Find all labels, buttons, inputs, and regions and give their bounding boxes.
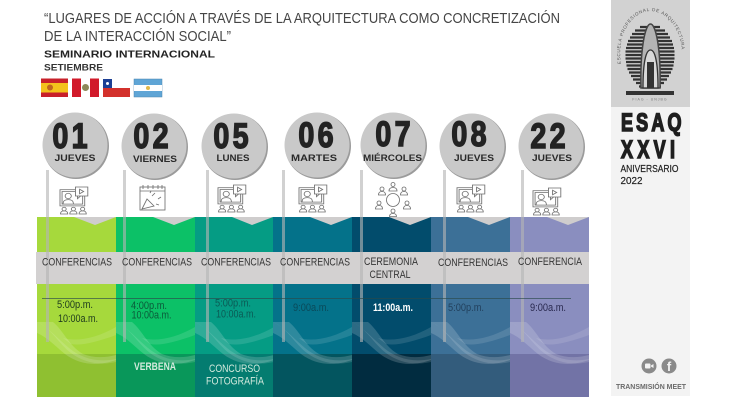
timeline colour columns bbox=[37, 217, 589, 397]
date: 02 viernes: 02 bbox=[133, 116, 169, 156]
logo bbox=[617, 8, 685, 102]
column 1 bbox=[37, 217, 116, 397]
icon: celebration calendar bbox=[140, 185, 165, 210]
date: 02 viernes: VIERNES bbox=[133, 154, 177, 165]
date: 22 jueves: 22 bbox=[530, 116, 566, 156]
date: 08 jueves bbox=[440, 114, 506, 180]
schedule times: 5:00p.m. bbox=[448, 302, 484, 314]
schedule times: 11:00a.m. bbox=[373, 302, 413, 314]
flag: Chile bbox=[103, 79, 130, 97]
activity icons bbox=[60, 182, 561, 216]
date: 01 jueves: JUEVES bbox=[54, 153, 96, 164]
column notches bbox=[74, 217, 589, 225]
horizontal timeline rule bbox=[42, 298, 571, 299]
schedule times: 10:00a.m. bbox=[132, 310, 172, 322]
date: 05 lunes: LUNES bbox=[216, 153, 250, 164]
schedule times: 9:00a.m. bbox=[530, 302, 566, 314]
date circles bbox=[42, 112, 585, 180]
vertical connector bars bbox=[46, 170, 524, 342]
anniversary text bbox=[620, 163, 678, 187]
date: 05 lunes: 05 bbox=[213, 116, 249, 156]
activity labels: CONFERENCIA bbox=[518, 256, 583, 268]
icon: facebook bbox=[662, 358, 676, 374]
schedule times: 10:00a.m. bbox=[216, 308, 256, 320]
date: 01 jueves bbox=[42, 112, 109, 179]
column 5 bbox=[352, 217, 431, 397]
schedule times: 5:00p.m. bbox=[215, 298, 251, 310]
date: 06 martes: MARTES bbox=[291, 153, 337, 164]
flag: Argentina bbox=[134, 79, 162, 97]
side panel bbox=[611, 0, 690, 396]
date: 06 martes bbox=[284, 112, 351, 179]
activity labels: CEREMONIA bbox=[364, 256, 419, 268]
title: “LUGARES DE ACCIÓN A TRAVÉS DE LA ARQUITECTURA COMO CONCRETIZACIÓN bbox=[44, 10, 560, 27]
bottom labels: FOTOGRAFÍA bbox=[206, 374, 265, 388]
bottom labels bbox=[134, 361, 265, 388]
activity labels: CONFERENCIAS bbox=[438, 257, 508, 269]
icon: group around circle bbox=[376, 182, 410, 216]
icon: facebook: f bbox=[667, 359, 672, 374]
bottom labels: CONCURSO bbox=[209, 363, 260, 375]
flag: Spain bbox=[41, 78, 68, 97]
anniversary heading: ESAQ bbox=[621, 108, 682, 137]
date: 01 jueves: 01 bbox=[52, 116, 88, 156]
icon: conference 22 bbox=[533, 188, 561, 215]
icon: conference 06 bbox=[299, 185, 327, 212]
date: 07 miercoles: 07 bbox=[375, 114, 411, 154]
activity labels: CONFERENCIAS bbox=[122, 256, 192, 268]
schedule times: 10:00a.m. bbox=[58, 313, 98, 325]
transmission label: TRANSMISIÓN MEET bbox=[616, 382, 686, 391]
date: 02 viernes bbox=[122, 114, 188, 180]
title bbox=[44, 10, 560, 45]
icon: conference 01 bbox=[60, 187, 88, 214]
anniversary heading: XXVI bbox=[621, 135, 675, 164]
date: 05 lunes bbox=[202, 114, 268, 180]
icon: conference 08 bbox=[457, 185, 485, 212]
gray activity band bbox=[36, 252, 589, 284]
date: 22 jueves bbox=[518, 114, 585, 180]
date: 06 martes: 06 bbox=[298, 115, 334, 155]
activity labels: CONFERENCIAS bbox=[280, 256, 350, 268]
flag: Peru bbox=[72, 78, 99, 97]
date: 07 miercoles: MIÉRCOLES bbox=[363, 153, 422, 164]
schedule times: 9:00a.m. bbox=[293, 302, 329, 314]
activity labels bbox=[42, 256, 583, 281]
subtitle: seminario internacional: SEMINARIO INTERNACIONAL bbox=[44, 48, 216, 60]
date: 07 miercoles bbox=[360, 112, 427, 179]
column 3 bbox=[195, 217, 274, 397]
anniversary text: ANIVERSARIO bbox=[620, 163, 678, 175]
date: 22 jueves: JUEVES bbox=[532, 153, 572, 164]
activity labels: CONFERENCIAS bbox=[42, 256, 112, 268]
column 6 bbox=[431, 217, 510, 397]
schedule times: 5:00p.m. bbox=[57, 299, 93, 311]
logo: FIAG - UNJBG bbox=[632, 98, 668, 102]
icon: video camera bbox=[642, 358, 656, 374]
logo: ESCUELA PROFESIONAL DE ARQUITECTURA bbox=[617, 8, 685, 64]
title: DE LA INTERACCIÓN SOCIAL” bbox=[44, 28, 231, 45]
bottom labels: VERBENA bbox=[134, 361, 176, 373]
date: 08 jueves: 08 bbox=[451, 114, 487, 154]
month label: SETIEMBRE bbox=[44, 62, 103, 72]
anniversary text: 2022 bbox=[620, 175, 643, 187]
icon: conference 05 bbox=[218, 185, 246, 212]
flags bbox=[41, 78, 162, 97]
activity labels: CENTRAL bbox=[370, 269, 410, 281]
anniversary heading bbox=[621, 108, 682, 164]
date: 08 jueves: JUEVES bbox=[454, 153, 494, 164]
column 2 bbox=[116, 217, 195, 397]
schedule times: 4:00p.m. bbox=[131, 300, 167, 312]
activity labels: CONFERENCIAS bbox=[201, 256, 271, 268]
column 4 bbox=[273, 217, 352, 397]
schedule times bbox=[57, 298, 566, 325]
column 7 bbox=[510, 217, 589, 397]
